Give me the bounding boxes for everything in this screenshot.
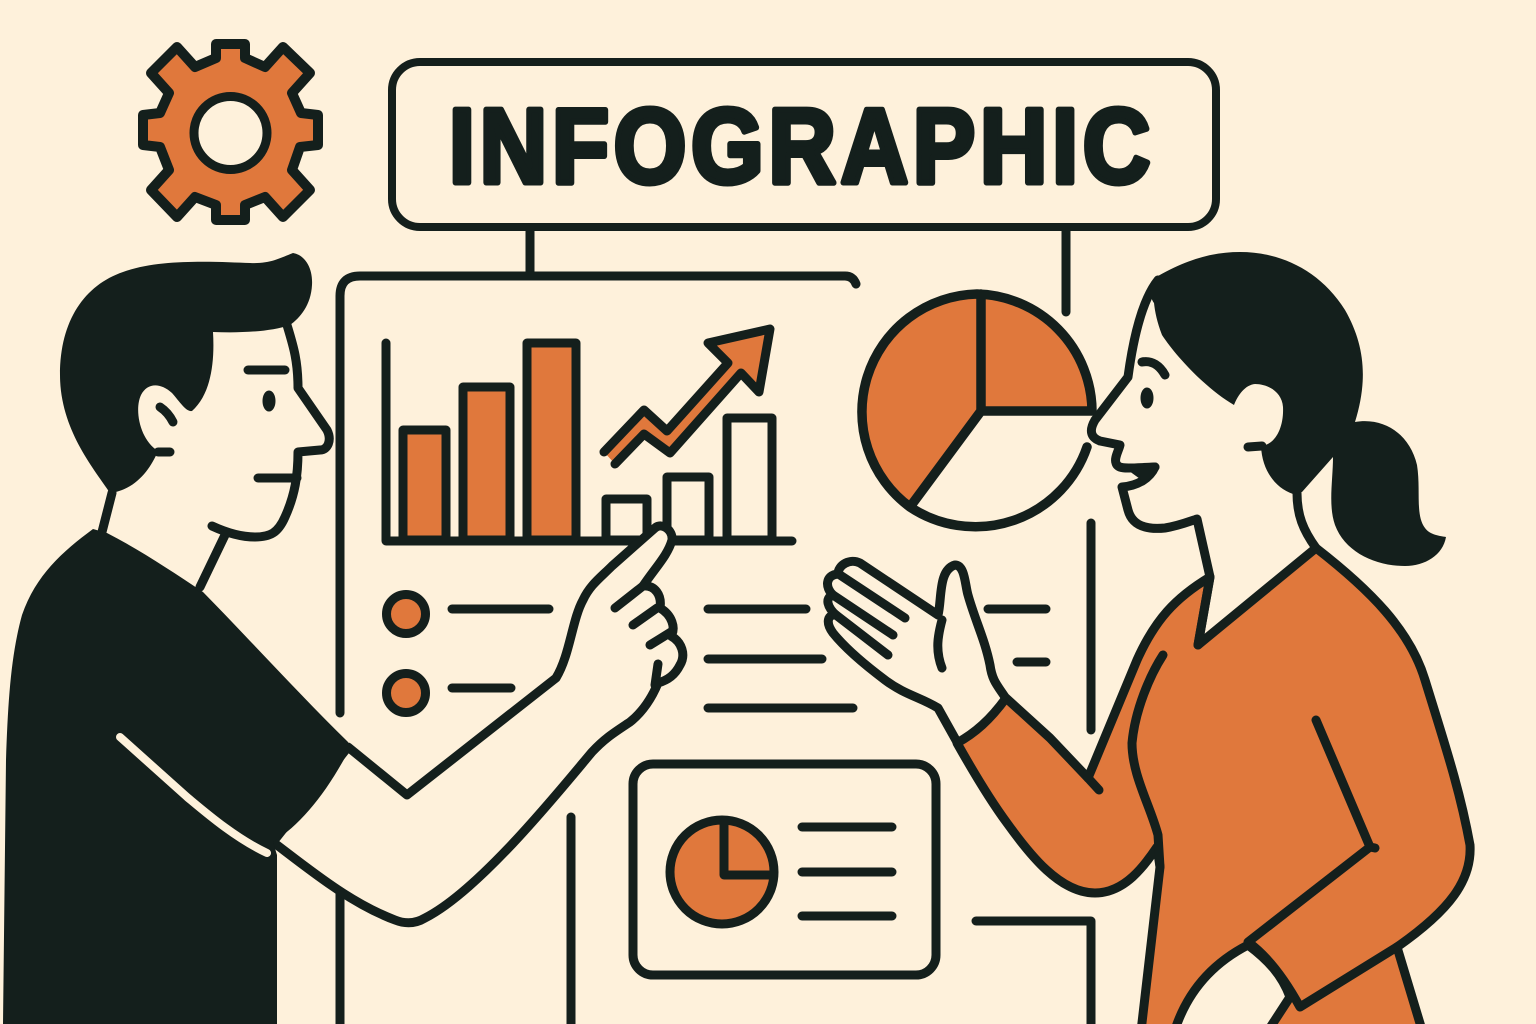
woman open hand [828, 561, 1005, 745]
trend arrow [604, 329, 770, 464]
woman [828, 252, 1470, 1024]
man arm and pointing hand [273, 526, 683, 923]
small card with pie chart [633, 764, 936, 975]
icon: gear [143, 44, 318, 220]
woman blouse folds [1088, 655, 1397, 1007]
man shirt highlight [120, 737, 267, 853]
man [3, 253, 683, 1024]
large pie chart [862, 294, 1095, 527]
man shirt [3, 529, 348, 1024]
man hair [60, 253, 312, 493]
man neck [102, 493, 225, 587]
title text: INFOGRAPHIC [449, 88, 1155, 206]
title box [392, 62, 1216, 227]
woman blouse [957, 548, 1470, 1024]
bar chart [386, 343, 792, 541]
connectors and board outline [340, 228, 1091, 1024]
woman hair [1151, 252, 1446, 566]
man face [158, 325, 329, 537]
woman face [1091, 280, 1262, 645]
woman neck [1297, 493, 1316, 548]
list bullets with text lines [386, 594, 1046, 712]
